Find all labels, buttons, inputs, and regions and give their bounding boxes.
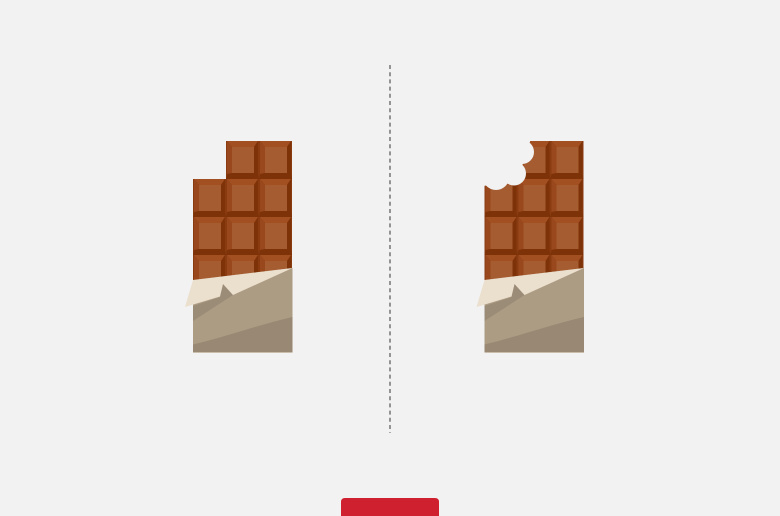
bitten chocolate bar — [476, 140, 584, 353]
red button — [341, 498, 439, 516]
divider: dashed line — [389, 65, 391, 433]
wrapper — [476, 268, 584, 353]
bite mark — [482, 140, 534, 190]
whole chocolate bar with missing piece — [185, 141, 292, 353]
chocolate squares with bite — [482, 140, 584, 293]
wrapper — [185, 268, 292, 353]
chocolate squares — [193, 141, 292, 293]
